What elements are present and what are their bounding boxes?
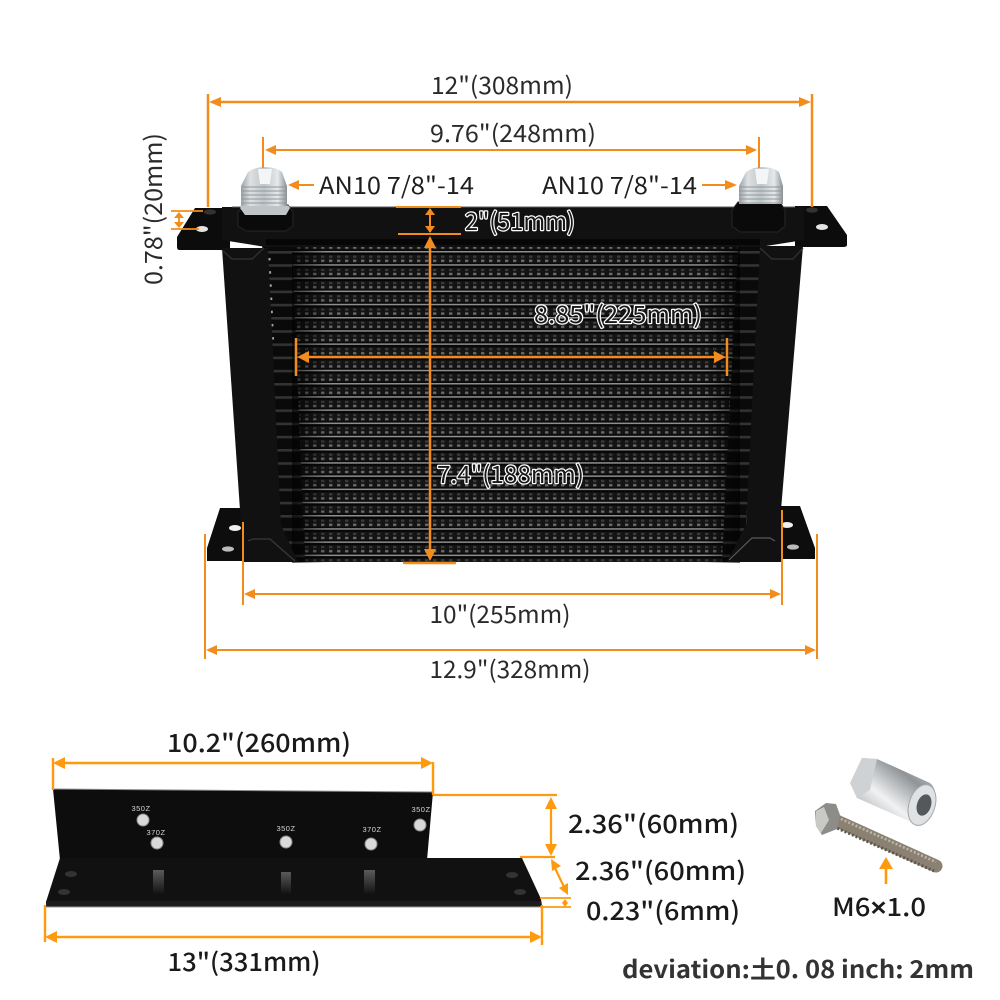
dimension: fitting spacing 9.76in: 9.76"(248mm) <box>430 114 596 149</box>
dimension: bracket lower width 13in: 13"(331mm) <box>168 943 320 979</box>
dimension: bracket base depth 2.36in: 2.36"(60mm) <box>575 852 746 888</box>
icon: steel spacer nut <box>850 758 941 829</box>
bracket upright plate <box>53 789 433 860</box>
top header bar <box>222 207 804 247</box>
dimension: core width 10in: 10"(255mm) <box>430 595 570 630</box>
dimension: header height 2in <box>396 202 575 237</box>
dimension: bracket thickness 0.23in: 0.23"(6mm) <box>586 892 740 928</box>
dimension: bracket upper width 10.2in: 10.2"(260mm) <box>167 724 351 760</box>
dimension: core width 10in <box>243 510 782 630</box>
bottom left flange <box>207 508 245 561</box>
dimension: core height 7.4in: 7.4"(188mm) <box>437 455 584 490</box>
dimension: overall bottom width 12.9in <box>205 534 817 685</box>
dimension: overall bottom width 12.9in: 12.9"(328mm) <box>430 650 590 685</box>
right top flange <box>795 206 847 247</box>
bracket base plate <box>46 858 542 906</box>
dimension: flange hole spacing 0.78in: 0.78"(20mm) <box>134 133 169 285</box>
label: M6x1.0: M6×1.0 <box>832 888 926 924</box>
right side tank <box>727 246 803 562</box>
bracket photo <box>46 789 542 907</box>
fin end dots <box>269 258 273 350</box>
dimension: core width 8.85in: 8.85"(225mm) <box>534 295 702 330</box>
flange holes <box>204 209 216 215</box>
left top flange <box>177 208 230 250</box>
label: left AN10 thread: AN10 7/8"-14 <box>319 166 474 201</box>
hole labels: 350Z <box>411 805 431 814</box>
dimension: bracket lower width 13in <box>45 905 542 979</box>
mounting holes <box>137 814 426 850</box>
dimension: bracket base depth 2.36in <box>520 852 746 895</box>
dimension: core height 7.4in <box>403 236 584 563</box>
dimension: core width 8.85in <box>296 295 727 376</box>
hole labels: 370Z <box>146 828 166 837</box>
label: right AN10 thread: AN10 7/8"-14 <box>542 166 697 201</box>
dimension: overall top width 12in <box>208 66 812 207</box>
icon: left AN10 fitting <box>238 167 293 231</box>
cooler photo <box>177 206 847 563</box>
dimension: bracket upright height 2.36in: 2.36"(60mm) <box>568 805 739 841</box>
left side tank <box>222 248 298 562</box>
dimension: fitting spacing 9.76in <box>263 114 759 168</box>
hole labels <box>131 804 431 837</box>
dimension: overall top width 12in: 12"(308mm) <box>431 66 573 101</box>
dimension: flange hole spacing 0.78in <box>134 133 203 285</box>
hole labels: 350Z <box>276 824 296 833</box>
bottom right flange <box>779 506 815 559</box>
dimension: header height 2in: 2"(51mm) <box>465 202 575 237</box>
arrow: bolt pointer <box>879 857 893 884</box>
dimension: bracket upright height 2.36in <box>433 795 739 856</box>
icon: right AN10 fitting <box>732 167 785 232</box>
core fins <box>262 243 764 562</box>
note: deviation: deviation:土0. 08 inch: 2mm <box>622 950 974 985</box>
icon: M6 hex bolt <box>815 803 936 871</box>
hole labels: 350Z <box>131 804 151 813</box>
hole labels: 370Z <box>362 825 382 834</box>
dimension: bracket upper width 10.2in <box>53 724 433 795</box>
